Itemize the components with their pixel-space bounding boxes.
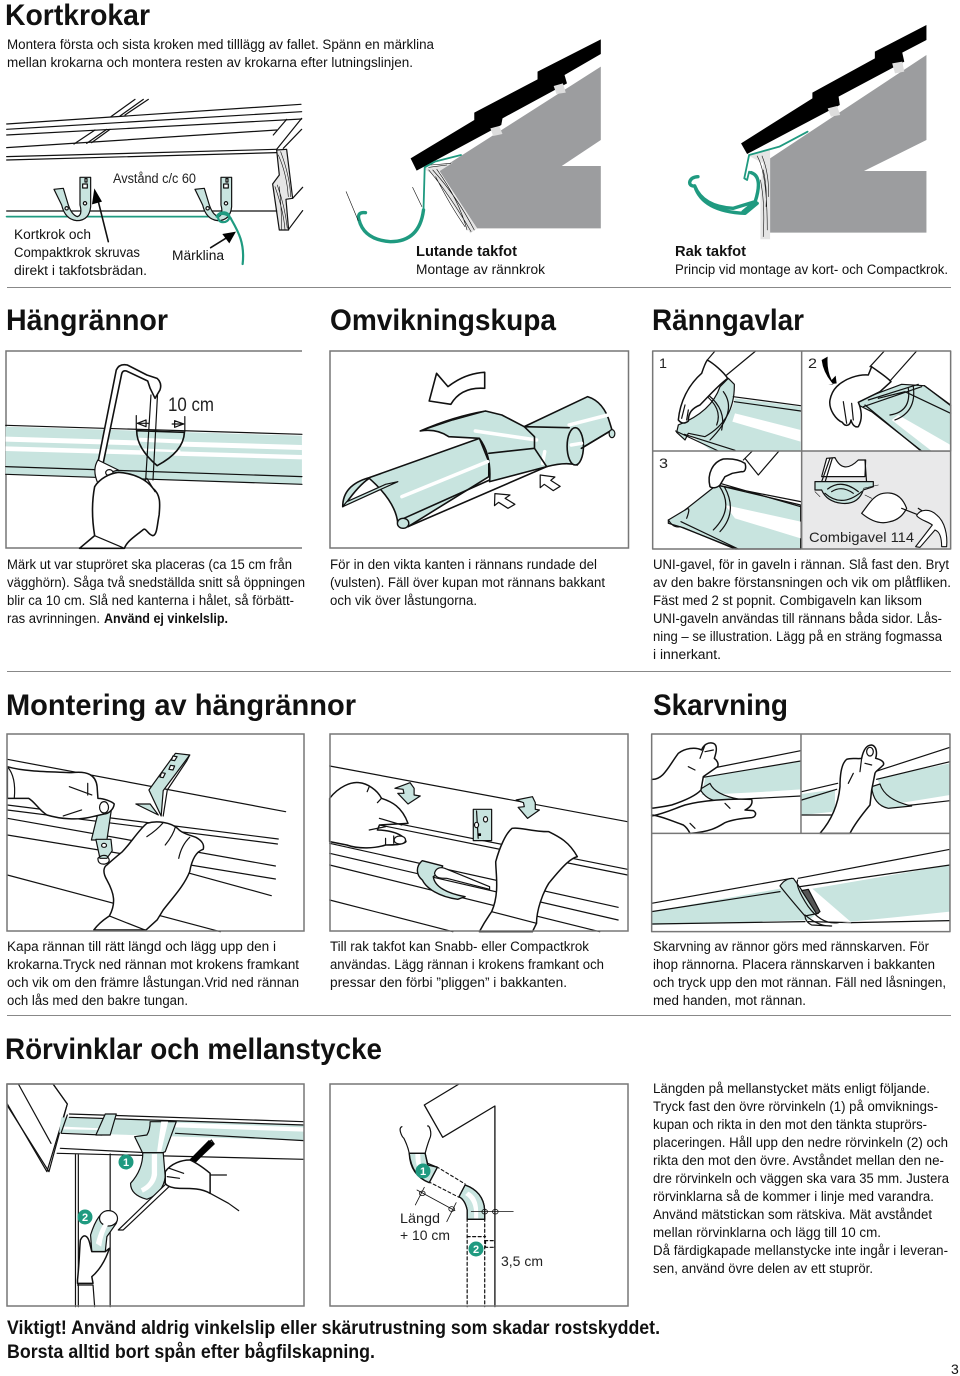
- text: measuring instructions: Använd mätstickan som rätskiva. Mät avståndet: [653, 1207, 932, 1222]
- text: long hook instructions: och vik om den främre låstungan.Vrid ned rännan: [7, 975, 299, 990]
- text: Skarvning instructions: [653, 939, 946, 1008]
- text: measuring instructions: dre rörvinkeln och väggen ska vara 35 mm. Justera: [653, 1171, 949, 1186]
- icon: push arrows: [494, 475, 560, 508]
- text: Hängrännor instructions: Använd ej vinkelslip.: [104, 611, 228, 626]
- badge 2: 2: [82, 1212, 88, 1224]
- panel: fold-over outlet fitting: [330, 351, 628, 548]
- text: short hook instructions: användas. Lägg rännan i krokens framkant och: [330, 957, 604, 972]
- illustration: hooks on fascia board with chalk line: Kortkrok och: [14, 227, 91, 242]
- text: Omvikningskupa instructions: För in den vikta kanten i rännans rundade del: [330, 557, 597, 572]
- illustration: sloping eaves: [346, 39, 601, 277]
- text: Skarvning instructions: Skarvning av rännor görs med rännskarven. För: [653, 939, 929, 954]
- panel: gutter ends, steps 1-3 and Combigavel: Combigavel 114: [809, 529, 914, 545]
- text: measuring instructions: Längden på mellanstycket mäts enligt följande.: [653, 1081, 930, 1096]
- panel: measuring length between bends: Längd: [400, 1210, 440, 1226]
- panel: cutting the gutter with a hacksaw: 10 cm: [168, 395, 214, 416]
- text: short hook instructions: Till rak takfot kan Snabb- eller Compactkrok: [330, 939, 589, 954]
- text: Omvikningskupa instructions: och vik över låstungorna.: [330, 593, 477, 608]
- section: Kortkrokar: [5, 0, 948, 278]
- text: measuring instructions: kupan och rikta in den mot den tänkta stuprörs-: [653, 1117, 927, 1132]
- text: measuring instructions: mellan rörvinklarna och lägg till 10 cm.: [653, 1225, 881, 1240]
- panel: gutter ends, steps 1-3 and Combigavel: 2: [808, 355, 817, 371]
- panel: aligning downpipe bends on the wall: [7, 1084, 304, 1307]
- heading: Skarvning: Skarvning: [653, 689, 788, 722]
- illustration: sloping eaves: Montage av rännkrok: [416, 262, 545, 277]
- intro text: Montera första och sista kroken med tilllägg av fallet. Spänn en märklina: [7, 37, 434, 52]
- text: Hängrännor instructions: vägghörn). Såga två snedställda snitt så öppningen: [7, 575, 305, 590]
- text: Hängrännor instructions: Märk ut var stupröret ska placeras (ca 15 cm från: [7, 557, 292, 572]
- text: Hängrännor instructions: blir ca 10 cm. Slå ned kanterna i hålet, så förbätt-: [7, 593, 294, 608]
- text: Skarvning instructions: med handen, mot rännan.: [653, 993, 806, 1008]
- callout: Viktigt warning: [7, 1318, 660, 1363]
- illustration: sloping eaves: Lutande takfot: [416, 243, 517, 260]
- illustration: hooks on fascia board with chalk line: direkt i takfotsbrädan.: [14, 263, 147, 278]
- illustration: straight eaves: Rak takfot: [675, 243, 746, 260]
- text: Ränngavlar instructions: av den bakre förstansningen och vik om plåtfliken.: [653, 575, 951, 590]
- text: Skarvning instructions: ihop rännorna. Placera rännskarven i bakkanten: [653, 957, 935, 972]
- panel: measuring length between bends: [400, 1084, 543, 1307]
- badge 2: [468, 1242, 484, 1256]
- text: Hängrännor instructions: [7, 557, 305, 626]
- heading: Ränngavlar: Ränngavlar: [652, 304, 804, 337]
- text: measuring instructions: Tryck fast den övre rörvinkeln (1) på omviknings-: [653, 1099, 938, 1114]
- panel: joining gutters with connector: [652, 734, 950, 932]
- text: long hook instructions: och lås med den bakre tungan.: [7, 993, 188, 1008]
- text: Ränngavlar instructions: i innerkant.: [653, 647, 721, 662]
- text: measuring instructions: rikta den mot den övre. Avståndet mellan den ne-: [653, 1153, 944, 1168]
- badge 1: 1: [123, 1157, 129, 1169]
- intro text: mellan krokarna och montera resten av krokarna efter lutningslinjen.: [7, 55, 413, 70]
- text: measuring instructions: Då färdigkapade mellanstycke inte ingår i leveran-: [653, 1243, 948, 1258]
- panel: measuring length between bends: 3,5 cm: [501, 1253, 543, 1269]
- intro text: [7, 37, 434, 70]
- panel: gutter ends, steps 1-3 and Combigavel: 1: [659, 355, 667, 371]
- text: measuring instructions: [653, 1081, 949, 1276]
- badge 2: [78, 1210, 92, 1224]
- badge 2: 2: [473, 1244, 479, 1256]
- badge 1: [118, 1154, 134, 1170]
- text: measuring instructions: sen, använd övre delen av ett stuprör.: [653, 1261, 873, 1276]
- panel: gutter ends, steps 1-3 and Combigavel: 3: [659, 455, 668, 471]
- badge 1: [416, 1164, 430, 1178]
- text: long hook instructions: krokarna.Tryck ned rännan mot krokens framkant: [7, 957, 299, 972]
- text: Skarvning instructions: och tryck upp den mot rännan. Fäll ned låsningen,: [653, 975, 946, 990]
- text: long hook instructions: Kapa rännan till rätt längd och lägg upp den i: [7, 939, 276, 954]
- illustration: hooks on fascia board with chalk line: Compaktkrok skruvas: [14, 245, 140, 260]
- text: Omvikningskupa instructions: (vulsten). Fäll över kupan mot rännans bakkant: [330, 575, 605, 590]
- panel: mounting gutter in short hooks: [330, 766, 628, 932]
- text: short hook instructions: [330, 939, 604, 990]
- heading: Hängrännor: Hängrännor: [6, 304, 168, 337]
- text: measuring instructions: placeringen. Håll upp den nedre rörvinkeln (2) och: [653, 1135, 948, 1150]
- text: long hook instructions: [7, 939, 299, 1008]
- badge 1: 1: [420, 1166, 426, 1178]
- text: Ränngavlar instructions: UNI-gaveln användas till rännans båda sidor. Lås-: [653, 611, 942, 626]
- illustration: hooks on fascia board with chalk line: Avstånd c/c 60: [113, 171, 196, 186]
- heading: Omvikningskupa: Omvikningskupa: [330, 304, 556, 337]
- text: measuring instructions: rörvinklarna så de kommer i linje med varandra.: [653, 1189, 934, 1204]
- text: Ränngavlar instructions: ning – se illustration. Lägg på en sträng fogmassa: [653, 629, 942, 644]
- text: Ränngavlar instructions: Fäst med 2 st popnit. Combigaveln kan liksom: [653, 593, 922, 608]
- callout: Viktigt warning: Viktigt! Använd aldrig vinkelslip eller skärutrustning som skadar rostskyddet.: [7, 1318, 660, 1339]
- text: Omvikningskupa instructions: [330, 557, 605, 608]
- panel: mounting gutter in long hooks: [7, 753, 286, 932]
- panel: gutter ends, steps 1-3 and Combigavel: [653, 351, 951, 549]
- illustration: hooks on fascia board with chalk line: Märklina: [172, 248, 224, 263]
- text: Ränngavlar instructions: UNI-gavel, för in gaveln i rännan. Slå fast den. Bryt: [653, 557, 949, 572]
- illustration: hooks on fascia board with chalk line: [7, 99, 303, 278]
- illustration: straight eaves: [675, 25, 948, 277]
- callout: Viktigt warning: Borsta alltid bort spån efter bågfilskapning.: [7, 1342, 375, 1363]
- panel frames for lower illustrations: [7, 734, 628, 1306]
- heading: Montering av hängrännor: Montering av hängrännor: [6, 689, 356, 722]
- heading: Rörvinklar och mellanstycke: Rörvinklar och mellanstycke: [5, 1033, 382, 1066]
- panel: cutting the gutter with a hacksaw: [6, 351, 302, 548]
- illustration: straight eaves: Princip vid montage av kort- och Compactkrok.: [675, 262, 948, 277]
- text: Hängrännor instructions: ras avrinningen.: [7, 611, 100, 626]
- text: short hook instructions: pressar den förbi ”pliggen” i bakkanten.: [330, 975, 567, 990]
- panel: measuring length between bends: + 10 cm: [400, 1227, 450, 1243]
- text: Ränngavlar instructions: [653, 557, 951, 662]
